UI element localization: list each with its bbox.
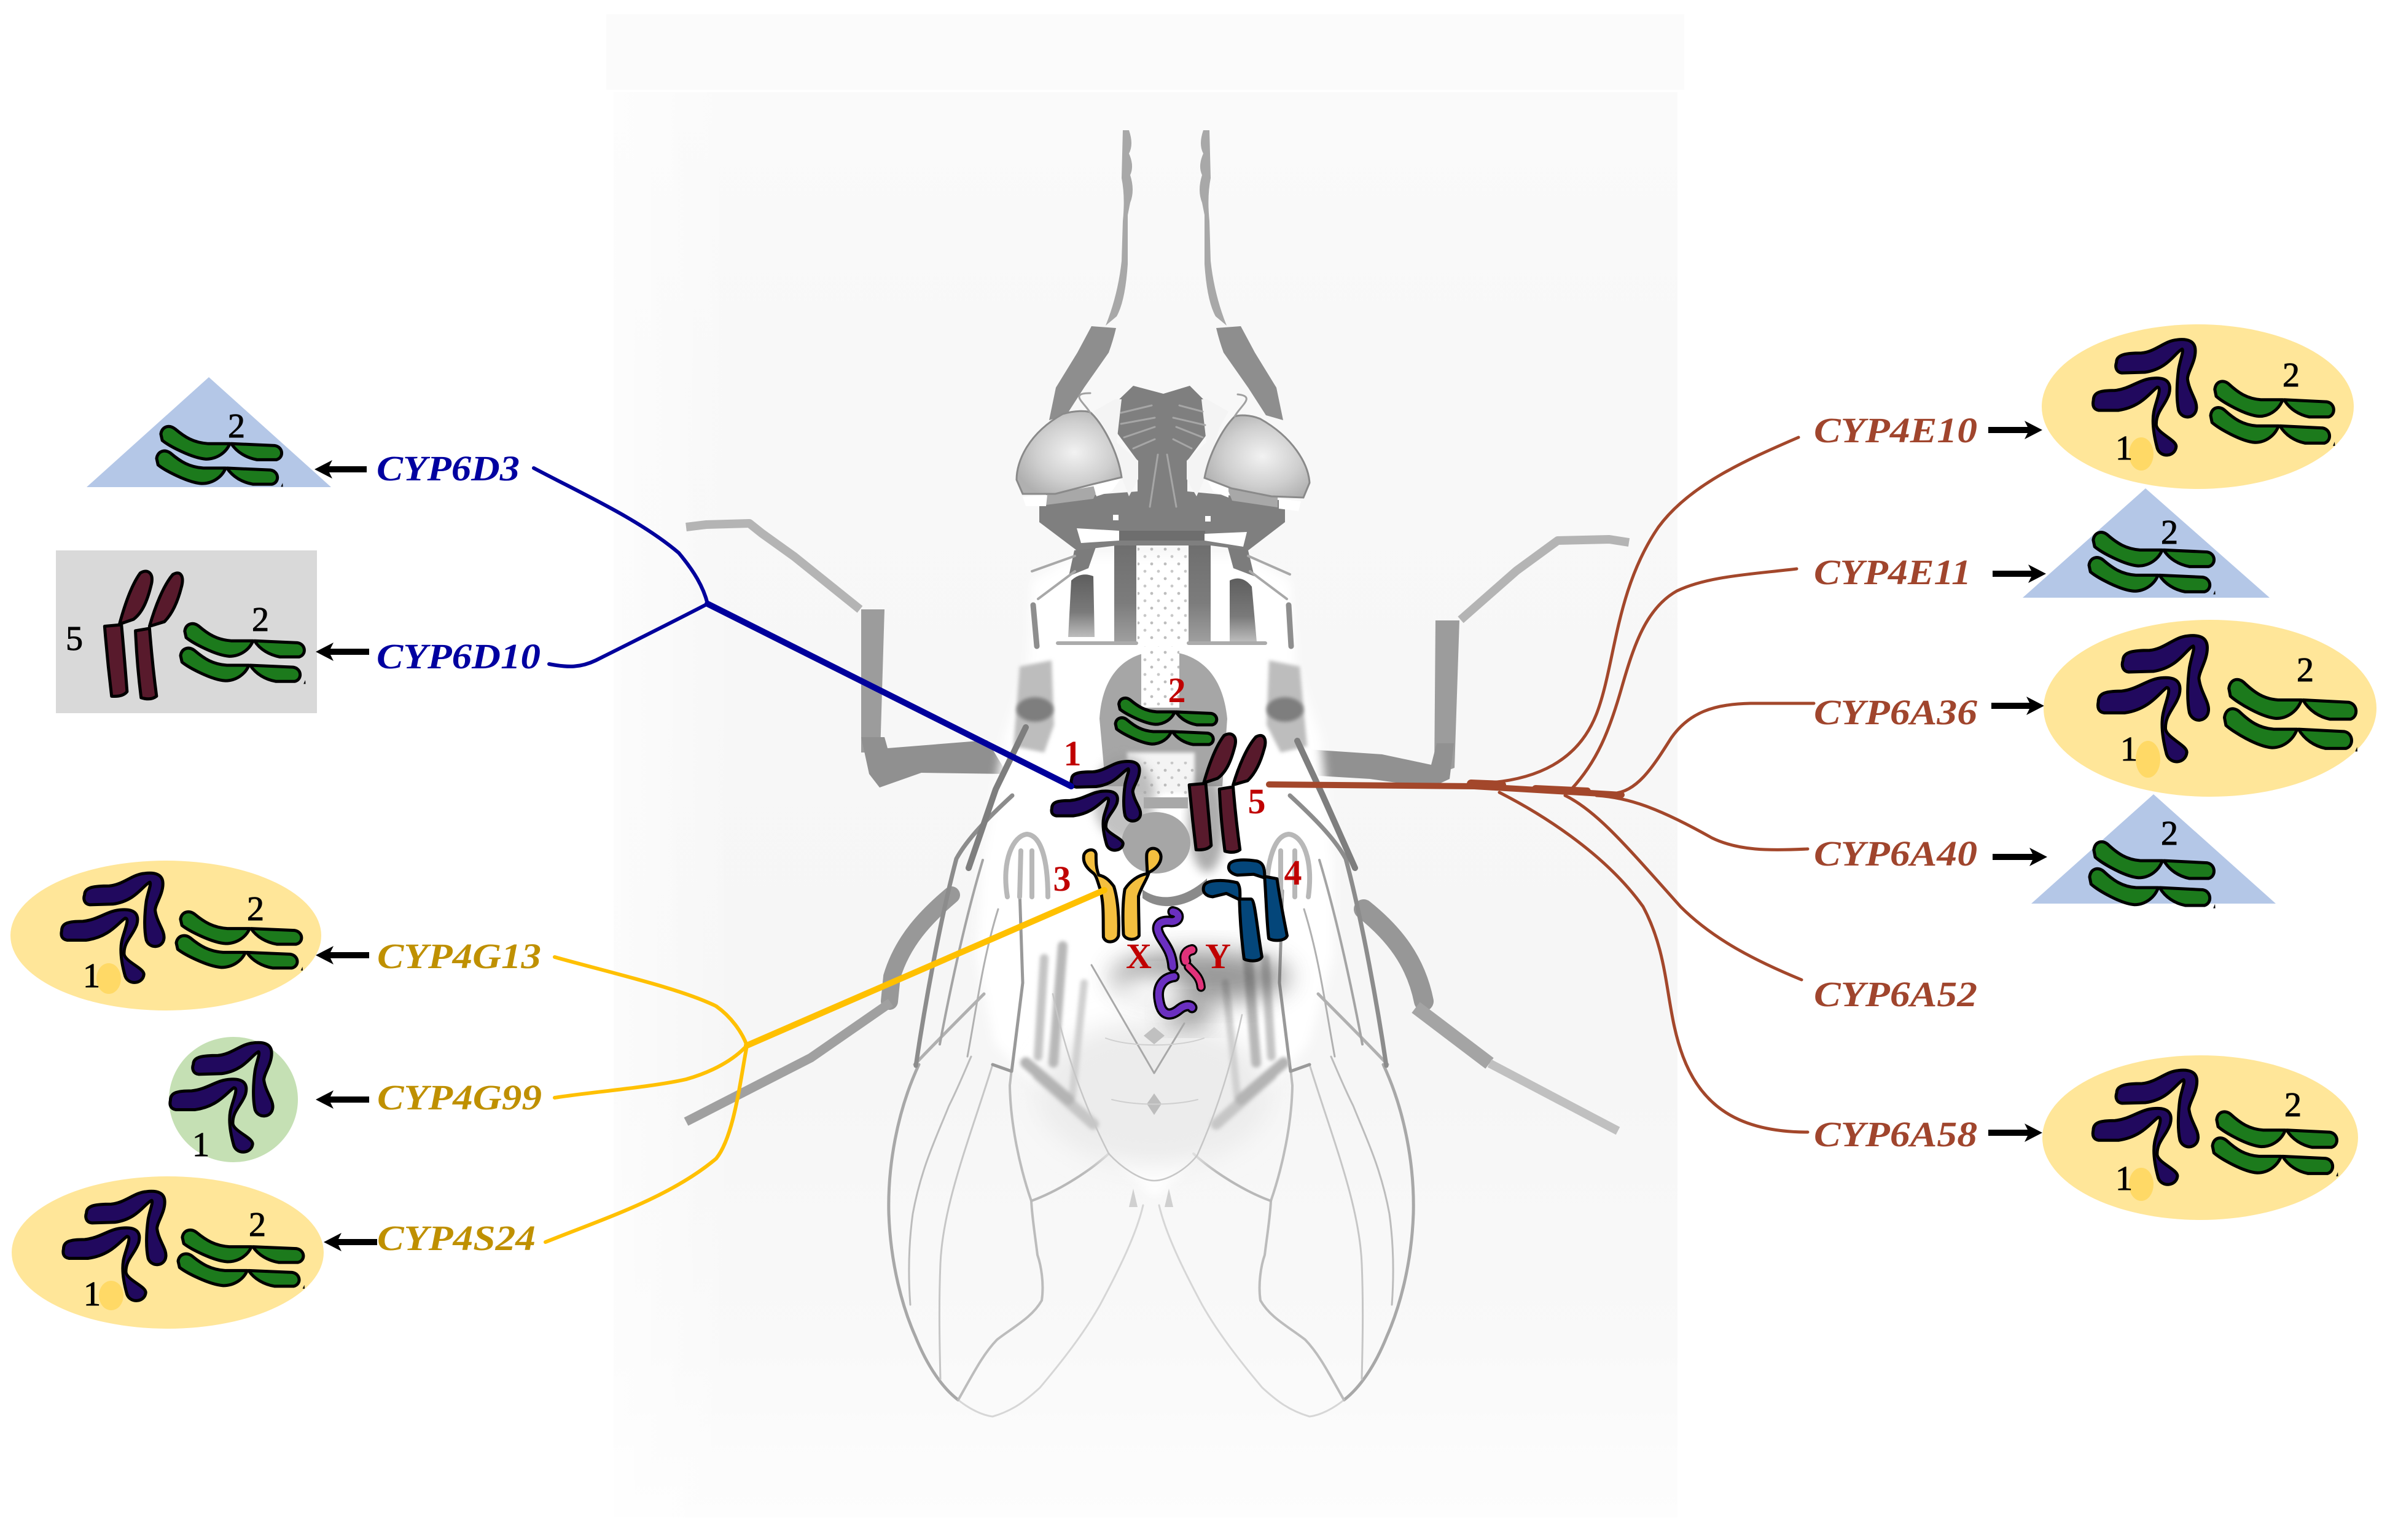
right badge: CYP4E10 ellipse with chromosomes 1 and 2: 2 xyxy=(2283,356,2300,394)
chromosome label X: X xyxy=(1126,936,1152,976)
gene label: CYP6A40: CYP6A40 xyxy=(1814,834,1977,874)
right badge: CYP6A58 ellipse with chromosomes 1 and 2: 1 xyxy=(2115,1160,2133,1198)
chromosome 1 xyxy=(1052,762,1141,850)
gene label: CYP6D3: CYP6D3 xyxy=(377,448,520,488)
fly head xyxy=(1017,386,1310,550)
panel: fly photo background band xyxy=(606,14,1684,90)
gene label: CYP4G99: CYP4G99 xyxy=(377,1077,542,1117)
left badge: CYP4G13 ellipse with chromosomes 1 and 2 xyxy=(10,861,321,1010)
right badge: CYP6A58 ellipse with chromosomes 1 and 2: 2 xyxy=(2284,1086,2302,1124)
fly lower thorax xyxy=(969,646,1355,906)
right badge: CYP4E10 ellipse with chromosomes 1 and 2 xyxy=(2042,324,2354,489)
connector lines: chromosome 1 group (blue) xyxy=(534,468,1071,786)
left badge: CYP6D3 triangle with chromosome 2 xyxy=(87,377,331,487)
chromosome 3 xyxy=(1084,848,1161,942)
gene label: CYP4G13: CYP4G13 xyxy=(377,936,541,976)
fly wings xyxy=(889,795,1413,1417)
right badge: CYP6A40 triangle with chromosome 2 xyxy=(2031,794,2276,909)
fly abdomen shading xyxy=(1026,946,1290,1207)
gene label: CYP4E11: CYP4E11 xyxy=(1814,552,1971,592)
right badge: CYP4E10 ellipse with chromosomes 1 and 2: 1 xyxy=(2115,429,2133,467)
chromosome Y xyxy=(1185,950,1201,987)
right badge: CYP6A58 ellipse with chromosomes 1 and 2 xyxy=(2042,1055,2358,1220)
fly illustration xyxy=(686,130,1629,1417)
right badge: CYP6A36 ellipse with chromosomes 1 and 2: 2 xyxy=(2297,651,2314,689)
left badge: CYP4G99 green circle with chromosome 1: 1 xyxy=(192,1126,209,1164)
arrow: CYP4E11 to badge xyxy=(1993,565,2046,583)
arrow: CYP4S24 to badge xyxy=(324,1233,377,1251)
gene label: CYP4E10: CYP4E10 xyxy=(1814,410,1977,450)
arrow: CYP4G13 to badge xyxy=(316,946,369,964)
connector lines: chromosome 5 group (brown) xyxy=(1269,437,1814,1132)
gene label: CYP6D10: CYP6D10 xyxy=(377,636,541,676)
arrow: CYP4G99 to badge xyxy=(316,1090,369,1109)
arrow: CYP6A36 to badge xyxy=(1991,697,2044,715)
fly body silhouette xyxy=(977,557,1333,1198)
chromosome X xyxy=(1158,912,1192,1014)
chromosome number 5: 5 xyxy=(1248,781,1265,821)
fly upper thorax xyxy=(1032,543,1291,646)
chromosome number 2: 2 xyxy=(1168,670,1185,710)
panel: fly photo background xyxy=(614,92,1677,1517)
arrow: CYP6A58 to badge xyxy=(1988,1124,2042,1142)
right badge: CYP6A36 ellipse with chromosomes 1 and 2 xyxy=(2044,620,2376,797)
left badge: CYP6D10 grey square with chromosomes 5 and 2: 5 xyxy=(66,620,83,658)
gene label: CYP6A58: CYP6A58 xyxy=(1814,1114,1977,1154)
left badge: CYP4S24 ellipse with chromosomes 1 and 2: 1 xyxy=(84,1275,101,1313)
chromosome 2 xyxy=(1115,698,1217,745)
left badge: CYP4S24 ellipse with chromosomes 1 and 2 xyxy=(12,1176,324,1329)
gene label: CYP4S24: CYP4S24 xyxy=(377,1218,536,1258)
right badge: CYP4E11 triangle with chromosome 2: 2 xyxy=(2161,514,2178,552)
chromosome 5 xyxy=(1189,734,1265,852)
chromosome number 4: 4 xyxy=(1284,853,1302,893)
left badge: CYP6D10 grey square with chromosomes 5 and 2: 2 xyxy=(252,601,269,639)
left badge: CYP6D10 grey square with chromosomes 5 and 2 xyxy=(56,550,317,713)
left badge: CYP4G13 ellipse with chromosomes 1 and 2: 1 xyxy=(83,957,100,995)
left badge: CYP4S24 ellipse with chromosomes 1 and 2: 2 xyxy=(249,1206,266,1244)
chromosome 4 xyxy=(1203,860,1287,961)
right badge: CYP6A40 triangle with chromosome 2: 2 xyxy=(2161,815,2178,853)
left badge: CYP6D3 triangle with chromosome 2: 2 xyxy=(228,407,245,445)
arrow: CYP6D10 to badge xyxy=(316,643,369,661)
arrow: CYP6D3 to badge xyxy=(314,460,367,479)
left badge: CYP4G13 ellipse with chromosomes 1 and 2: 2 xyxy=(247,890,264,928)
chromosome number 3: 3 xyxy=(1053,859,1071,899)
arrow: CYP4E10 to badge xyxy=(1988,421,2042,439)
right badge: CYP4E11 triangle with chromosome 2 xyxy=(2023,488,2270,598)
chromosome label Y: Y xyxy=(1205,936,1231,976)
gene label: CYP6A52: CYP6A52 xyxy=(1814,974,1977,1014)
connector lines: chromosome 3 group (yellow) xyxy=(545,890,1104,1242)
left badge: CYP4G99 green circle with chromosome 1 xyxy=(169,1037,298,1164)
gene label: CYP6A36: CYP6A36 xyxy=(1814,692,1977,732)
chromosome number 1: 1 xyxy=(1064,733,1081,773)
fly legs xyxy=(686,130,1629,1131)
central chromosomes with red numbers xyxy=(1052,670,1302,1014)
arrow: CYP6A40 to badge xyxy=(1993,848,2047,866)
right badge: CYP6A36 ellipse with chromosomes 1 and 2: 1 xyxy=(2120,730,2138,768)
